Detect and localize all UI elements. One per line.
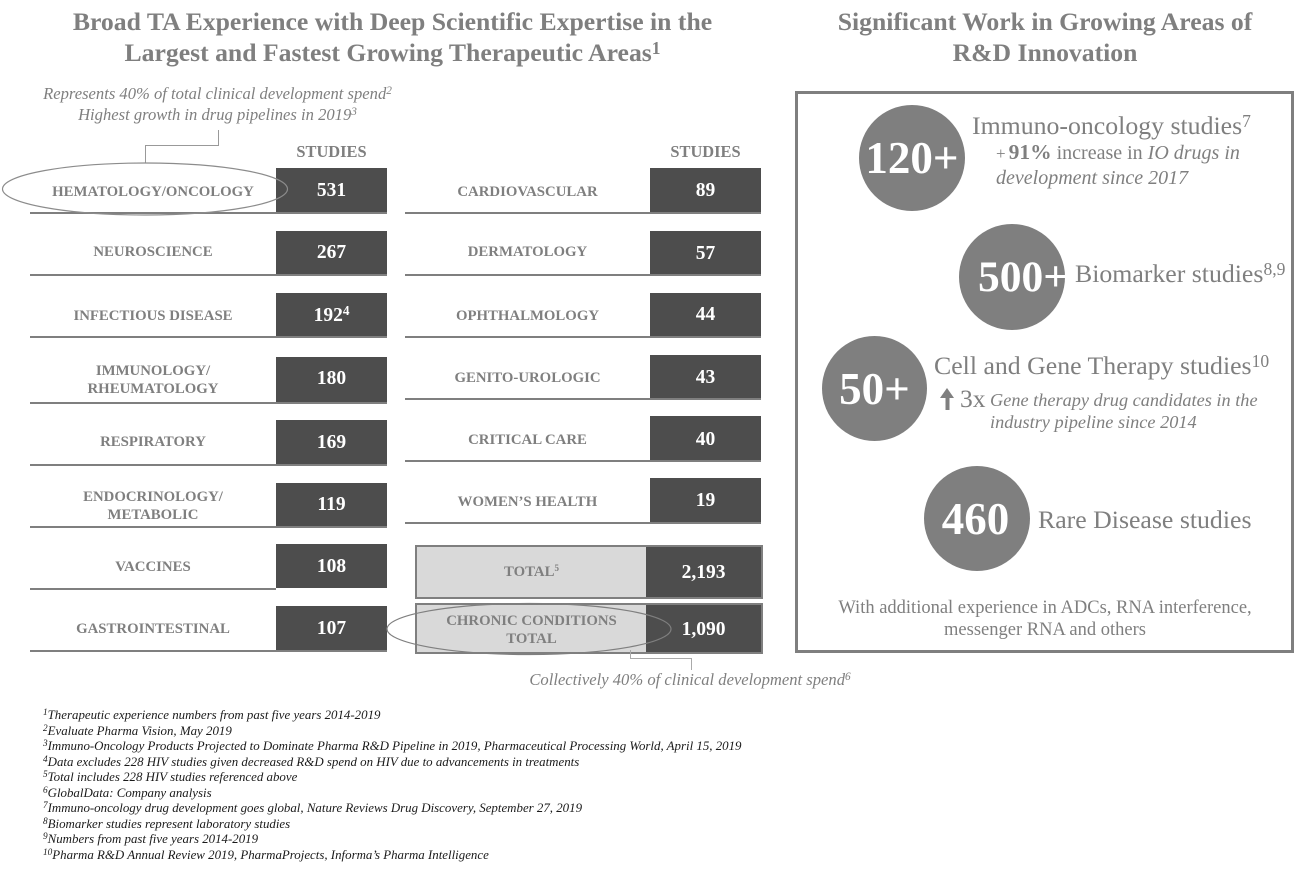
row: respiratory [30, 420, 387, 466]
row: vaccines: VACCINES [115, 559, 191, 575]
row: critical care [405, 416, 761, 462]
circle: 50+ [822, 336, 927, 441]
footnotes: 7Immuno-oncology drug development goes global, Nature Reviews Drug Discovery, September 27, 2019 [43, 801, 582, 815]
row: cardiovascular [405, 168, 761, 214]
row: ophthalmology: OPHTHALMOLOGY [456, 308, 599, 324]
ellipse highlight: chronic conditions [386, 602, 672, 656]
text: rare disease studies: Rare Disease studies [1038, 505, 1251, 534]
row: women's health: 19 [696, 490, 715, 511]
footnotes: 10Pharma R&D Annual Review 2019, PharmaProjects, Informa’s Pharma Intelligence [43, 848, 489, 862]
footnotes: 5Total includes 228 HIV studies referenced above [43, 770, 297, 784]
row: neuroscience [30, 231, 387, 276]
callout connector: bottom [630, 650, 692, 670]
row: respiratory: RESPIRATORY [100, 434, 206, 450]
text: biomarker studies: Biomarker studies8,9 [1075, 259, 1285, 288]
row: neuroscience: NEUROSCIENCE [93, 244, 213, 260]
row: dermatology [405, 231, 761, 276]
footnotes: 3Immuno-Oncology Products Projected to Dominate Pharma R&D Pipeline in 2019, Pharmaceutical Processing World, April 15, 2019 [43, 739, 742, 753]
row: infectious disease: 1924 [314, 303, 349, 326]
row: infectious disease [30, 293, 387, 338]
row: immunology/rheumatology: RHEUMATOLOGY [88, 380, 218, 396]
row: genito-urologic: GENITO-UROLOGIC [454, 370, 601, 386]
row: critical care: 40 [696, 428, 715, 450]
circle: 50+: 50+ [839, 364, 910, 414]
row: endocrinology/metabolic: ENDOCRINOLOGY/ [83, 488, 223, 504]
row: genito-urologic: 43 [696, 366, 715, 388]
text: 91% increase: +91% increase in IO drugs in [996, 140, 1240, 164]
callout: hematology/oncology note: Highest growth in drug pipelines in 20193 [78, 105, 357, 124]
row: dermatology: DERMATOLOGY [468, 244, 587, 260]
ellipse highlight: hematology/oncology [2, 162, 288, 216]
text: immuno-oncology studies: Immuno-oncology studies7 [972, 111, 1251, 140]
heading: right: R&D Innovation [953, 38, 1137, 67]
text: gene therapy drug candidates [990, 390, 1258, 432]
row: hematology/oncology: 531 [317, 180, 346, 201]
circle: 460 [924, 466, 1030, 571]
total row [415, 545, 763, 599]
column header: studies right: STUDIES [670, 142, 741, 161]
footnotes: 8Biomarker studies represent laboratory studies [43, 816, 290, 830]
row: infectious disease: INFECTIOUS DISEASE [73, 308, 233, 324]
text: 91% increase: development since 2017 [996, 167, 1188, 189]
text: additional experience [838, 598, 1252, 640]
row: vaccines [30, 544, 387, 590]
footnotes: 9Numbers from past five years 2014-2019 [43, 832, 258, 846]
row: neuroscience: 267 [317, 242, 346, 262]
heading: left: Largest and Fastest Growing Therapeutic Areas1 [124, 38, 661, 67]
chronic conditions total row [415, 603, 763, 654]
text: cell and gene therapy studies: Cell and Gene Therapy studies10 [934, 351, 1269, 380]
total row: 2,193 [682, 562, 725, 583]
heading: right [838, 7, 1253, 67]
chronic conditions total row: TOTAL [506, 630, 557, 646]
row: endocrinology/metabolic: 119 [317, 494, 346, 514]
row: gastrointestinal: 107 [317, 618, 346, 639]
circle: 460: 460 [942, 494, 1009, 544]
heading: right: Significant Work in Growing Areas of [838, 7, 1252, 36]
heading: left [73, 7, 712, 67]
callout connector: top [145, 130, 219, 162]
text: 3x: 3x [960, 384, 986, 413]
row: women's health: WOMEN’S HEALTH [458, 494, 597, 510]
text: 91% increase [996, 140, 1240, 189]
row: ophthalmology [405, 293, 761, 338]
circle: 120+ [859, 105, 965, 211]
callout: chronic conditions note: Collectively 40% of clinical development spend6 [529, 670, 851, 689]
column header: studies left: STUDIES [296, 142, 367, 161]
footnotes [43, 708, 742, 862]
row: endocrinology/metabolic [30, 483, 387, 528]
row: respiratory: 169 [317, 432, 346, 453]
heading: left: Broad TA Experience with Deep Scientific Expertise in the [73, 7, 712, 36]
panel: R&D innovation [795, 91, 1294, 653]
text: additional experience: With additional experience in ADCs, RNA interference, [838, 598, 1252, 618]
row: ophthalmology: 44 [696, 304, 715, 324]
footnotes: 2Evaluate Pharma Vision, May 2019 [43, 724, 232, 738]
text: gene therapy drug candidates: industry pipeline since 2014 [990, 412, 1197, 432]
row: vaccines: 108 [317, 556, 346, 577]
row: immunology/rheumatology: 180 [317, 368, 346, 388]
row: genito-urologic [405, 355, 761, 400]
row: dermatology: 57 [696, 242, 715, 264]
row: critical care: CRITICAL CARE [468, 432, 587, 448]
row: immunology/rheumatology [30, 357, 387, 404]
total row: 5 [554, 563, 559, 573]
row: hematology/oncology: HEMATOLOGY/ONCOLOGY [52, 184, 254, 200]
row: women's health [405, 478, 761, 524]
chronic conditions total row: 1,090 [682, 618, 725, 640]
footnotes: 6GlobalData: Company analysis [43, 786, 212, 800]
row: gastrointestinal: GASTROINTESTINAL [76, 621, 230, 637]
chronic conditions total row: CHRONIC CONDITIONS [446, 612, 617, 628]
row: cardiovascular: CARDIOVASCULAR [457, 184, 598, 200]
callout: hematology/oncology note: Represents 40% of total clinical development spend2 [43, 84, 392, 103]
text: gene therapy drug candidates: Gene therapy drug candidates in the [990, 390, 1258, 410]
footnotes: 4Data excludes 228 HIV studies given decreased R&D spend on HIV due to advancements in treatments [43, 754, 579, 768]
row: cardiovascular: 89 [696, 180, 715, 201]
text: additional experience: messenger RNA and others [944, 620, 1146, 640]
icon: up arrow [940, 388, 954, 410]
row: gastrointestinal [30, 606, 387, 652]
circle: 500+ [959, 224, 1065, 330]
total row: TOTAL [504, 564, 554, 580]
text: 500+: 500+ [978, 253, 1068, 301]
footnotes: 1Therapeutic experience numbers from past five years 2014-2019 [43, 708, 380, 722]
row: hematology/oncology [30, 168, 387, 214]
circle: 120+: 120+ [865, 133, 959, 183]
row: immunology/rheumatology: IMMUNOLOGY/ [96, 362, 210, 378]
callout: hematology/oncology note [43, 84, 392, 124]
row: endocrinology/metabolic: METABOLIC [107, 506, 198, 522]
